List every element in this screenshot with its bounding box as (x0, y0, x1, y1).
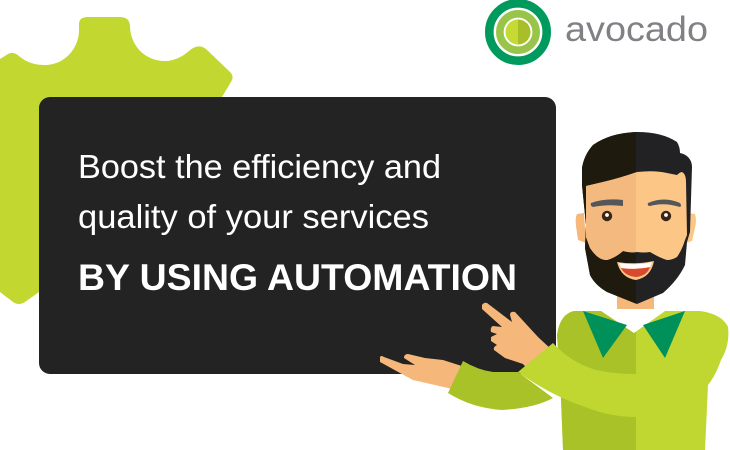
logo wordmark: avocado (565, 10, 708, 49)
collar (583, 309, 685, 358)
lower open hand (380, 354, 468, 390)
board panel (39, 97, 556, 374)
eyes (602, 211, 671, 221)
heading: second line: quality of your services (78, 198, 429, 235)
forearm left sleeve (448, 361, 553, 410)
torso (557, 311, 728, 450)
ears (576, 213, 586, 243)
icon: avocado rings (489, 3, 547, 61)
eyebrows (591, 199, 681, 207)
heading: first line: Boost the efficiency and (78, 148, 441, 185)
arm across torso (518, 343, 650, 417)
mouth (617, 261, 654, 280)
heading: bold line: BY USING AUTOMATION (78, 257, 517, 298)
upper pointing hand (482, 303, 552, 372)
face (586, 171, 687, 260)
illustration: bearded man pointing (380, 132, 728, 450)
logo: avocado (489, 3, 708, 61)
neck (617, 296, 654, 312)
head (582, 132, 692, 304)
hair and beard silhouette (582, 132, 692, 304)
icon: gear behind board (0, 17, 233, 304)
